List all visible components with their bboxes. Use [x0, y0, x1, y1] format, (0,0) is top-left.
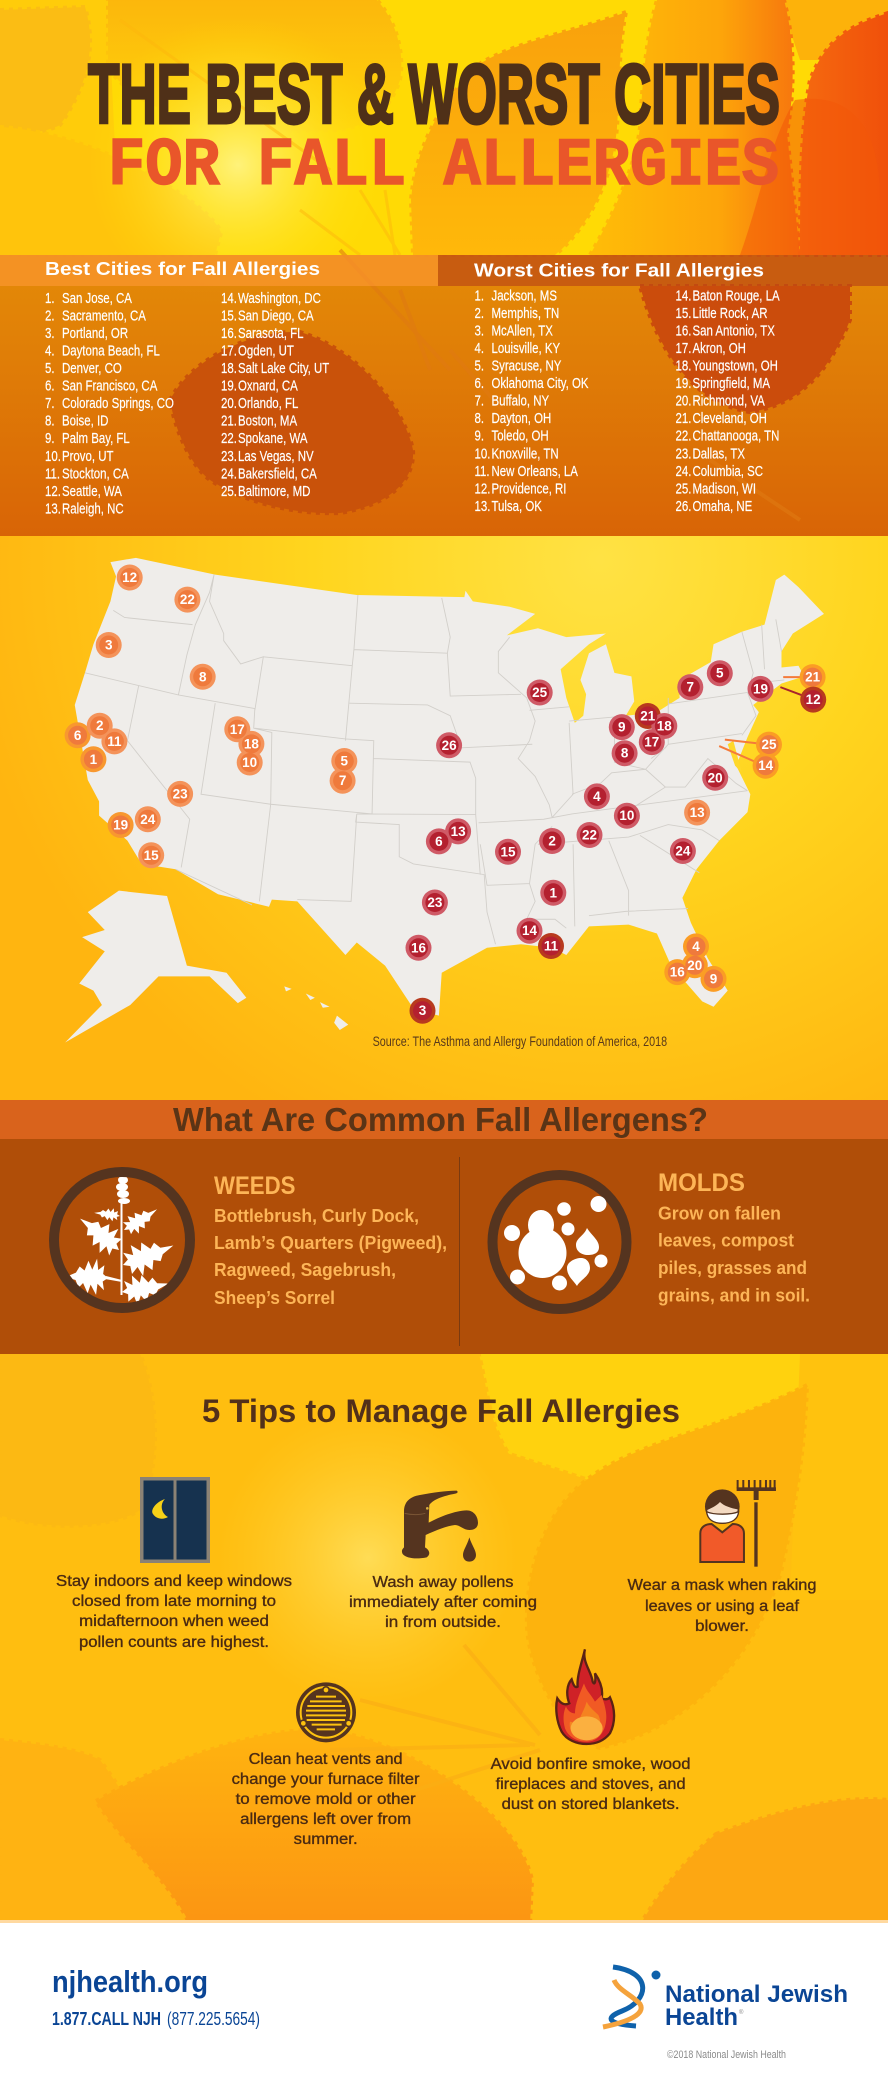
markers: best cities: 12: [122, 570, 137, 585]
best list column 1: Colorado Springs, CO: [62, 395, 174, 412]
worst list column 1: 9.: [474, 427, 484, 444]
markers: worst cities: 10: [619, 808, 634, 823]
markers: best cities: 10: [242, 755, 257, 770]
markers: best cities: 21: [805, 670, 821, 685]
best list column 2: Boston, MA: [238, 412, 297, 429]
markers: best cities: 9: [710, 971, 717, 986]
markers: worst cities: 4: [593, 789, 601, 804]
worst list column 1: Louisville, KY: [491, 340, 560, 356]
icon: person with rake: [700, 1480, 776, 1567]
best list column 2: 15.: [221, 307, 237, 324]
text: weeds: Ragweed, Sagebrush,: [214, 1260, 396, 1280]
text: molds: piles, grasses and: [658, 1258, 807, 1278]
text: molds: grains, and in soil.: [658, 1285, 810, 1305]
copyright: ©2018 National Jewish Health: [667, 2049, 786, 2061]
worst list column 1: Buffalo, NY: [491, 392, 549, 409]
tip 5: smoke: Avoid bonfire smoke, wood: [491, 1756, 691, 1773]
worst list column 1: 1.: [474, 287, 484, 304]
markers: worst cities: 24: [675, 844, 691, 858]
worst list column 1: Tulsa, OK: [491, 498, 542, 514]
text: weeds: Sheep’s Sorrel: [214, 1288, 335, 1308]
markers: best cities: 7: [339, 773, 346, 788]
text: weeds: [214, 1172, 447, 1308]
icon: flame: [556, 1649, 614, 1744]
worst list column 1: Memphis, TN: [491, 305, 559, 321]
best list column 1: 7.: [45, 395, 55, 412]
header background with leaves: [0, 0, 888, 536]
markers: best cities: 6: [74, 728, 82, 743]
best list column 2: 21.: [221, 412, 237, 429]
markers: best cities: 19: [113, 818, 128, 832]
text: molds: leaves, compost: [658, 1231, 794, 1251]
markers: worst cities: 12: [806, 692, 821, 707]
worst list column 2: Youngstown, OH: [692, 357, 778, 374]
markers: worst cities: 11: [544, 938, 559, 954]
worst list column 2: 16.: [676, 322, 691, 339]
worst list column 1: Syracuse, NY: [491, 357, 562, 374]
best list column 2: 14.: [221, 290, 237, 306]
best list column 2: 23.: [221, 447, 237, 464]
markers: worst cities: 5: [716, 666, 724, 681]
worst list column 1: 10.: [474, 445, 490, 462]
heading: best cities: Best Cities for Fall Allergies: [45, 258, 320, 279]
panel: city lists: [0, 250, 888, 536]
text: molds: Grow on fallen: [658, 1203, 781, 1223]
worst list column 1: Dayton, OH: [491, 410, 551, 427]
markers: worst cities: 19: [753, 681, 768, 696]
worst list column 2: 23.: [676, 445, 691, 462]
markers: worst cities: 9: [618, 720, 626, 735]
best list column 1: 11.: [45, 465, 60, 482]
worst list column 2: 26.: [676, 498, 691, 514]
phone: 1.877.CALL NJH: [52, 2009, 161, 2029]
source note: Source: The Asthma and Allergy Foundation of America, 2018: [373, 1033, 667, 1049]
markers: best cities: 11: [107, 734, 122, 749]
markers: best cities: 8: [199, 669, 207, 684]
tip 3: mask: leaves or using a leaf: [645, 1598, 800, 1615]
logo: [603, 1967, 848, 2031]
worst list column 1: McAllen, TX: [491, 322, 553, 339]
markers: worst cities: [406, 660, 826, 1024]
markers: best cities: 16: [670, 965, 685, 980]
best list column 2: Orlando, FL: [238, 395, 298, 412]
text: molds: MOLDS: [658, 1169, 745, 1197]
markers: worst cities: 23: [427, 895, 443, 910]
markers: worst cities: 6: [435, 834, 443, 849]
worst list column 1: Providence, RI: [491, 480, 567, 497]
worst list column 2: 22.: [676, 427, 691, 444]
worst list column 2: 24.: [676, 462, 691, 479]
worst list column 2: 15.: [676, 305, 691, 321]
best list column 2: 20.: [221, 395, 237, 412]
best list column 1: Portland, OR: [62, 325, 128, 341]
worst list column 2: Springfield, MA: [692, 375, 770, 392]
markers: worst cities: 14: [522, 923, 537, 938]
markers: worst cities: 26: [442, 738, 457, 753]
markers: best cities: 23: [173, 786, 188, 801]
tip 5: smoke: [491, 1649, 691, 1813]
text: weeds: WEEDS: [214, 1172, 296, 1200]
worst list column 2: Columbia, SC: [692, 462, 763, 479]
panel: common fall allergens: [0, 1100, 888, 1354]
icon: mold: [492, 1175, 626, 1309]
worst list column 2: 25.: [676, 480, 691, 497]
markers: worst cities: 3: [419, 1003, 427, 1018]
tip 4: vents: Clean heat vents and: [249, 1751, 403, 1768]
markers: best cities: 22: [180, 592, 195, 607]
worst list column 2: 20.: [676, 392, 691, 409]
markers: best cities: 17: [230, 722, 245, 737]
icon: faucet: [402, 1491, 478, 1562]
best list column 1: 13.: [45, 500, 61, 517]
markers: best cities: 1: [90, 752, 98, 767]
tip 1: windows: pollen counts are highest.: [79, 1634, 269, 1651]
best list column 2: [221, 290, 329, 499]
best list column 1: 1.: [45, 290, 55, 306]
worst list column 1: 13.: [474, 498, 490, 514]
best list column 1: Boise, ID: [62, 412, 108, 429]
text: molds: [658, 1169, 810, 1305]
worst list column 1: 2.: [474, 305, 484, 321]
markers: best cities: [65, 564, 826, 992]
tip 4: vents: allergens left over from: [240, 1811, 411, 1828]
best list column 2: 17.: [221, 342, 237, 359]
worst list column 2: 18.: [676, 357, 691, 374]
text: weeds: Bottlebrush, Curly Dock,: [214, 1206, 419, 1226]
markers: worst cities: 21: [640, 708, 656, 724]
worst list column 1: Jackson, MS: [491, 287, 557, 304]
best list column 2: Sarasota, FL: [238, 325, 303, 341]
logo: Health: [665, 2004, 738, 2031]
markers: worst cities: 13: [451, 824, 466, 839]
markers: best cities: 25: [761, 737, 777, 752]
markers: worst cities: 1: [550, 885, 558, 900]
markers: best cities: 24: [140, 812, 156, 827]
tip 4: vents: [232, 1682, 420, 1848]
best list column 1: [45, 290, 174, 517]
worst list column 2: 17.: [676, 340, 691, 356]
markers: worst cities: 7: [687, 680, 694, 695]
icon: window: [140, 1477, 210, 1563]
best list column 1: Daytona Beach, FL: [62, 342, 160, 359]
logo: ®: [739, 2009, 744, 2016]
worst list column 2: Chattanooga, TN: [692, 427, 779, 444]
tip 3: mask: [628, 1480, 816, 1635]
worst list column 2: San Antonio, TX: [692, 322, 775, 339]
tip 2: wash: [349, 1491, 537, 1631]
best list column 2: Ogden, UT: [238, 342, 294, 359]
worst list column 2: 14.: [676, 287, 691, 304]
tip 4: vents: to remove mold or other: [236, 1791, 416, 1808]
worst list column 2: [676, 287, 780, 514]
best list column 1: Sacramento, CA: [62, 307, 146, 324]
worst list column 2: Richmond, VA: [692, 392, 765, 409]
heading: allergens: What Are Common Fall Allergens?: [173, 1101, 708, 1138]
best list column 1: Denver, CO: [62, 360, 122, 376]
tip 3: mask: Wear a mask when raking: [628, 1577, 816, 1594]
markers: worst cities: 25: [532, 685, 548, 700]
tip 1: windows: closed from late morning to: [72, 1593, 276, 1610]
markers: worst cities: 8: [621, 746, 629, 761]
markers: worst cities: 20: [708, 770, 723, 785]
worst list column 2: Madison, WI: [692, 480, 756, 497]
logo: National Jewish: [665, 1981, 848, 2008]
worst list column 1: 4.: [474, 340, 484, 356]
US map: [65, 558, 824, 1042]
best list column 1: Seattle, WA: [62, 483, 122, 499]
best list column 2: Las Vegas, NV: [238, 447, 314, 464]
markers: best cities: 3: [105, 638, 113, 652]
best list column 2: Salt Lake City, UT: [238, 360, 329, 376]
best list column 1: Raleigh, NC: [62, 500, 124, 517]
best list column 2: Baltimore, MD: [238, 483, 310, 499]
tips background with leaves: [0, 1354, 888, 1925]
worst list column 2: Little Rock, AR: [692, 305, 767, 321]
worst list column 1: 12.: [474, 480, 490, 497]
best list column 1: 6.: [45, 377, 55, 394]
worst list column 2: Omaha, NE: [692, 498, 752, 514]
best list column 2: 18.: [221, 360, 237, 376]
icon: vent: [296, 1682, 356, 1742]
text: weeds: Lamb’s Quarters (Pigweed),: [214, 1233, 447, 1253]
worst list column 1: 3.: [474, 322, 484, 339]
best list column 1: 8.: [45, 412, 55, 429]
best list column 1: San Francisco, CA: [62, 377, 158, 394]
best list column 1: Provo, UT: [62, 447, 113, 464]
heading: worst cities: Worst Cities for Fall Allergies: [474, 260, 764, 280]
markers: best cities: 4: [692, 939, 700, 954]
title: FOR FALL ALLERGIES: [108, 128, 779, 205]
worst list column 1: 11.: [474, 462, 490, 479]
worst list column 2: Dallas, TX: [692, 445, 745, 462]
best list column 2: Oxnard, CA: [238, 377, 298, 394]
tip 2: wash: in from outside.: [385, 1614, 501, 1631]
best list column 1: 4.: [45, 342, 55, 359]
markers: worst cities: 2: [548, 834, 556, 848]
worst list column 1: Toledo, OH: [491, 427, 549, 444]
worst list column 2: Baton Rouge, LA: [692, 287, 780, 304]
markers: best cities: 14: [758, 758, 774, 773]
best list column 1: 9.: [45, 430, 55, 447]
worst list column 1: 6.: [474, 375, 484, 392]
tip 1: windows: [56, 1477, 292, 1651]
worst list column 2: Akron, OH: [692, 340, 746, 356]
tip 2: wash: immediately after coming: [349, 1594, 537, 1611]
best list column 1: 12.: [45, 483, 61, 499]
phone: (877.225.5654): [167, 2009, 260, 2029]
worst list column 2: 21.: [676, 410, 691, 427]
best list column 1: 5.: [45, 360, 55, 376]
markers: best cities: 15: [144, 848, 159, 863]
markers: worst cities: 18: [657, 718, 672, 734]
worst list column 1: [474, 287, 589, 514]
markers: worst cities: 16: [411, 940, 426, 955]
markers: best cities: 13: [690, 805, 705, 820]
tip 2: wash: Wash away pollens: [372, 1574, 514, 1591]
best list column 2: San Diego, CA: [238, 307, 314, 324]
best list column 2: Washington, DC: [238, 290, 321, 306]
worst list column 1: Oklahoma City, OK: [491, 375, 589, 392]
markers: worst cities: 22: [582, 828, 597, 842]
worst list column 1: 8.: [474, 410, 484, 427]
tip 5: smoke: fireplaces and stoves, and: [496, 1776, 686, 1793]
best list column 2: 16.: [221, 325, 237, 341]
heading: tips: 5 Tips to Manage Fall Allergies: [202, 1393, 680, 1429]
worst list column 1: 5.: [474, 357, 484, 374]
best list column 1: Palm Bay, FL: [62, 430, 130, 447]
map section background: [0, 536, 888, 1100]
worst list column 1: Knoxville, TN: [491, 445, 559, 462]
best list column 2: 24.: [221, 465, 237, 482]
title: [88, 62, 779, 186]
best list column 2: Bakersfield, CA: [238, 465, 317, 482]
tip 1: windows: Stay indoors and keep windows: [56, 1573, 292, 1590]
markers: best cities: 2: [96, 718, 103, 733]
best list column 2: 19.: [221, 377, 237, 394]
icon: weed: [54, 1172, 190, 1308]
tip 3: mask: blower.: [695, 1618, 749, 1635]
markers: best cities: 18: [244, 736, 259, 751]
worst list column 2: Cleveland, OH: [692, 410, 767, 427]
best list column 1: Stockton, CA: [62, 465, 129, 482]
markers: best cities: 5: [341, 754, 349, 768]
tip 5: smoke: dust on stored blankets.: [502, 1796, 680, 1813]
footer: [0, 1920, 888, 2097]
website: njhealth.org: [52, 1964, 208, 1999]
best list column 2: 22.: [221, 430, 237, 447]
tip 1: windows: midafternoon when weed: [79, 1613, 269, 1630]
best list column 1: 10.: [45, 447, 61, 464]
best list column 1: 2.: [45, 307, 55, 324]
worst list column 1: 7.: [474, 392, 484, 409]
phone: [52, 2009, 260, 2029]
best list column 2: 25.: [221, 483, 237, 499]
tip 4: vents: change your furnace filter: [232, 1771, 420, 1788]
markers: best cities: 20: [687, 958, 702, 973]
best list column 1: 3.: [45, 325, 55, 341]
worst list column 2: 19.: [676, 375, 691, 392]
best list column 2: Spokane, WA: [238, 430, 308, 447]
best list column 1: San Jose, CA: [62, 290, 132, 306]
worst list column 1: New Orleans, LA: [491, 462, 578, 479]
markers: worst cities: 15: [500, 844, 516, 859]
tip 4: vents: summer.: [294, 1831, 358, 1848]
markers: worst cities: 17: [644, 735, 659, 750]
